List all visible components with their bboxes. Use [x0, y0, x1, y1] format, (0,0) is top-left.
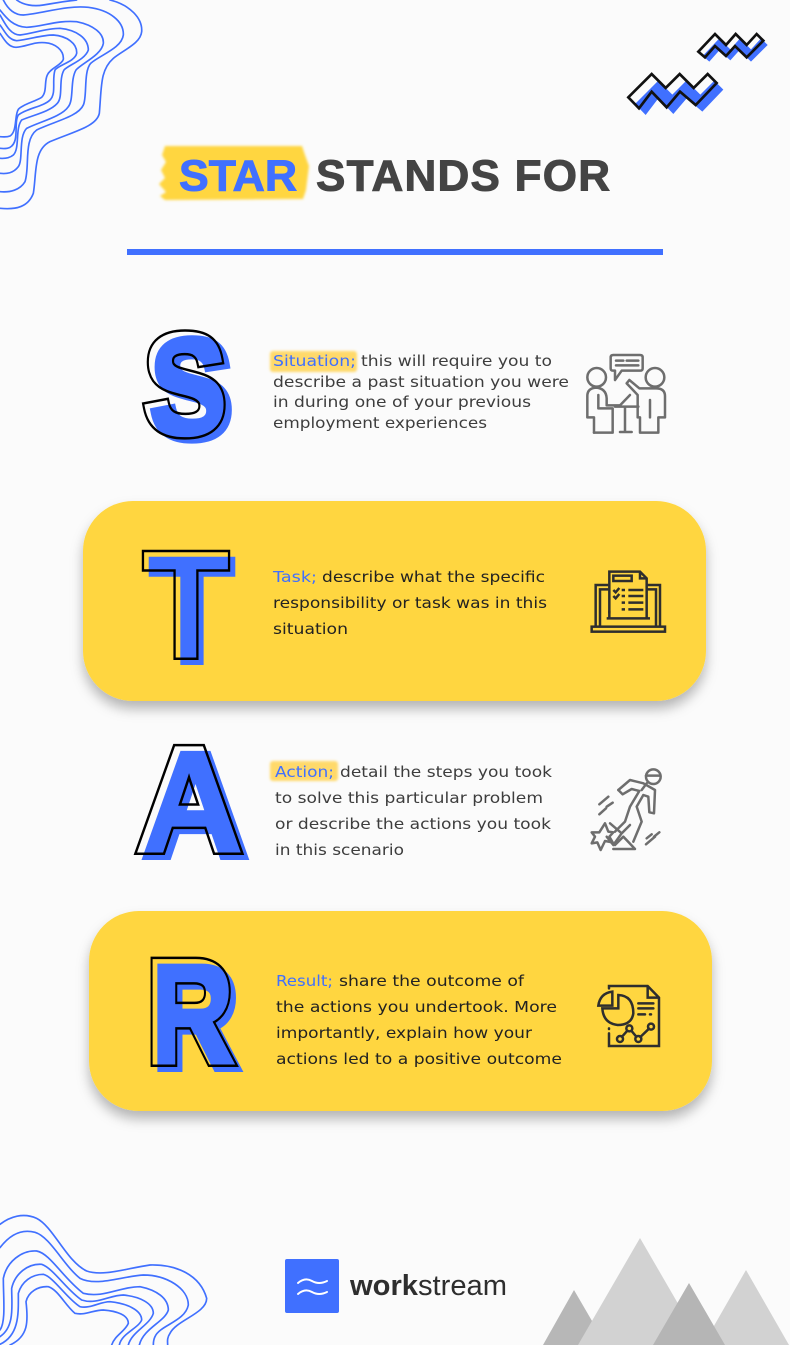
icon: person on jet board — [592, 769, 661, 850]
letter A: A — [144, 723, 248, 887]
Situation text — [273, 352, 569, 432]
title — [159, 146, 610, 200]
letter S — [142, 329, 232, 444]
panel: Action — [134, 744, 662, 860]
title words STANDS FOR: STANDS FOR — [316, 152, 610, 200]
Task text — [272, 568, 547, 638]
letter A — [134, 744, 250, 860]
decoration: grey mountains — [543, 1238, 789, 1345]
logo mark — [285, 1259, 339, 1313]
Task text: Task; — [272, 568, 317, 586]
Result text — [276, 972, 562, 1068]
panel: Situation — [142, 329, 666, 444]
logo: workstream — [285, 1259, 507, 1313]
Situation text: Situation; — [273, 352, 356, 370]
icon: laptop with checklist — [592, 572, 665, 632]
panel: Task — [83, 501, 706, 701]
Action text: detail the steps you took — [340, 763, 552, 781]
Task text: describe what the specific — [322, 568, 545, 586]
letter R: R — [154, 938, 238, 1098]
yellow card — [83, 501, 706, 701]
brush highlight behind STAR — [159, 146, 309, 200]
Result text: share the outcome of — [339, 972, 525, 990]
Situation text: in during one of your previous — [273, 393, 531, 411]
decoration: contour lines top left — [0, 0, 142, 209]
Task text: responsibility or task was in this — [273, 594, 547, 612]
panel: Result — [89, 911, 712, 1111]
Action text: to solve this particular problem — [275, 789, 543, 807]
icon: report with pie and line chart — [598, 986, 659, 1046]
Situation text: describe a past situation you were — [273, 373, 569, 391]
Action text: or describe the actions you took — [275, 815, 551, 833]
Situation text: employment experiences — [273, 414, 487, 432]
Situation text: this will require you to — [361, 352, 552, 370]
Action text: in this scenario — [275, 841, 404, 859]
logo wordmark: workstream — [349, 1270, 507, 1302]
Result text: actions led to a positive outcome — [276, 1050, 562, 1068]
letter T: T — [149, 526, 235, 697]
decoration: zigzag marks top right — [628, 34, 768, 115]
Task text: situation — [273, 620, 348, 638]
title word STAR: STAR — [179, 152, 297, 200]
decoration: contour lines bottom left — [0, 1216, 207, 1345]
Situation highlight — [270, 351, 357, 372]
icon: two people talking at table — [587, 355, 665, 433]
letter R — [150, 956, 244, 1072]
Action text: Action; — [275, 763, 334, 781]
Result text: importantly, explain how your — [276, 1024, 533, 1042]
Action text — [275, 763, 552, 859]
Result text: the actions you undertook. More — [276, 998, 557, 1016]
letter T — [142, 550, 236, 665]
yellow card — [89, 911, 712, 1111]
Action highlight — [270, 761, 338, 781]
title rule — [127, 249, 663, 255]
Result text: Result; — [276, 972, 333, 990]
letter S: S — [152, 311, 232, 467]
